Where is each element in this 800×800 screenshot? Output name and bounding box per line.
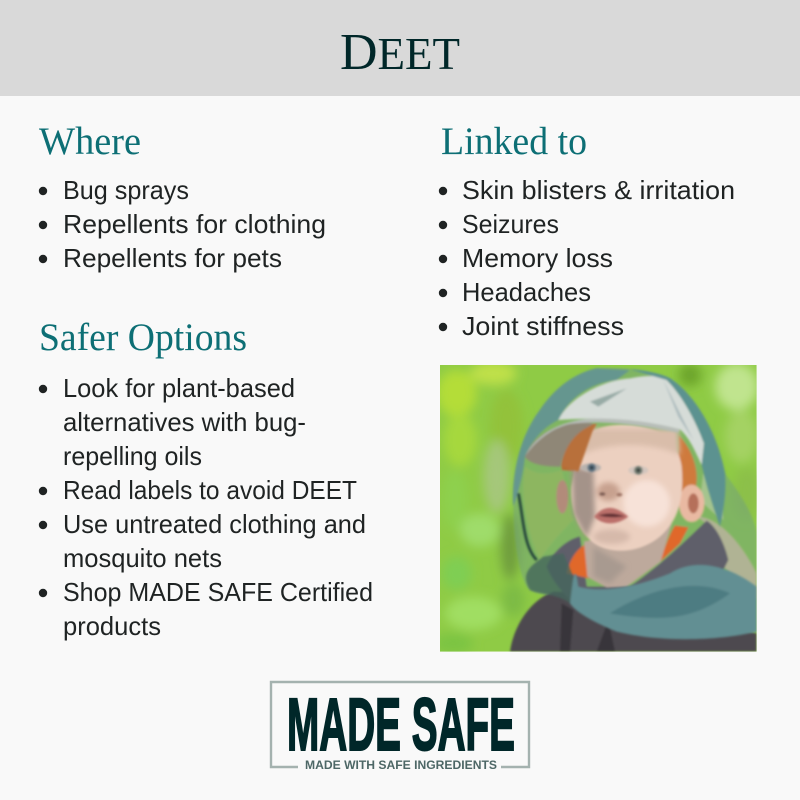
list: safer options: repelling oils [63,441,202,471]
list: where [39,175,326,273]
logo: MADE SAFE [271,682,529,772]
list: safer options: products [63,611,161,641]
list: where: Repellents for pets [63,243,282,273]
heading: safer options: Safer Options [39,316,247,359]
list: linked to: Seizures [462,209,559,239]
list: where: Repellents for clothing [63,209,326,239]
net over background [513,368,757,639]
face [571,425,682,551]
list: safer options: Read labels to avoid DEET [63,475,357,505]
list: where: Bug sprays [63,175,189,205]
mouth [594,508,628,523]
logo frame [271,682,529,767]
panel: linked to [439,120,735,341]
list: linked to: Headaches [462,277,591,307]
cap underside [525,422,593,467]
ears [556,480,568,513]
jacket [510,592,757,652]
cap top [558,376,704,465]
panel: where [39,120,326,273]
net overlay [513,368,630,507]
list: safer options: alternatives with bug- [63,407,306,437]
list: linked to: Skin blisters & irritation [462,175,735,205]
orange collar [567,526,688,578]
list: linked to: Joint stiffness [462,311,624,341]
photo: child wearing a mosquito net over a cap [433,362,760,653]
title: DEET [340,24,460,81]
neck [584,523,672,587]
list: safer options: Shop MADE SAFE Certified [63,577,373,607]
heading: linked to: Linked to [441,120,587,163]
list: safer options: Use untreated clothing and [63,509,366,539]
list: safer options [39,373,373,641]
hood [547,520,730,592]
panel: safer options [39,316,373,641]
net gathered at the bottom [570,565,757,639]
list: linked to [439,175,735,341]
header band [0,0,800,96]
list: safer options: Look for plant-based [63,373,295,403]
eyes [581,463,601,472]
list: safer options: mosquito nets [63,543,222,573]
list: linked to: Memory loss [462,243,613,273]
heading: where: Where [39,120,141,163]
logo wordmark: MADE SAFE [287,683,515,766]
logo tagline: MADE WITH SAFE INGREDIENTS [305,758,497,772]
nostrils [599,492,605,496]
hair [678,435,697,497]
